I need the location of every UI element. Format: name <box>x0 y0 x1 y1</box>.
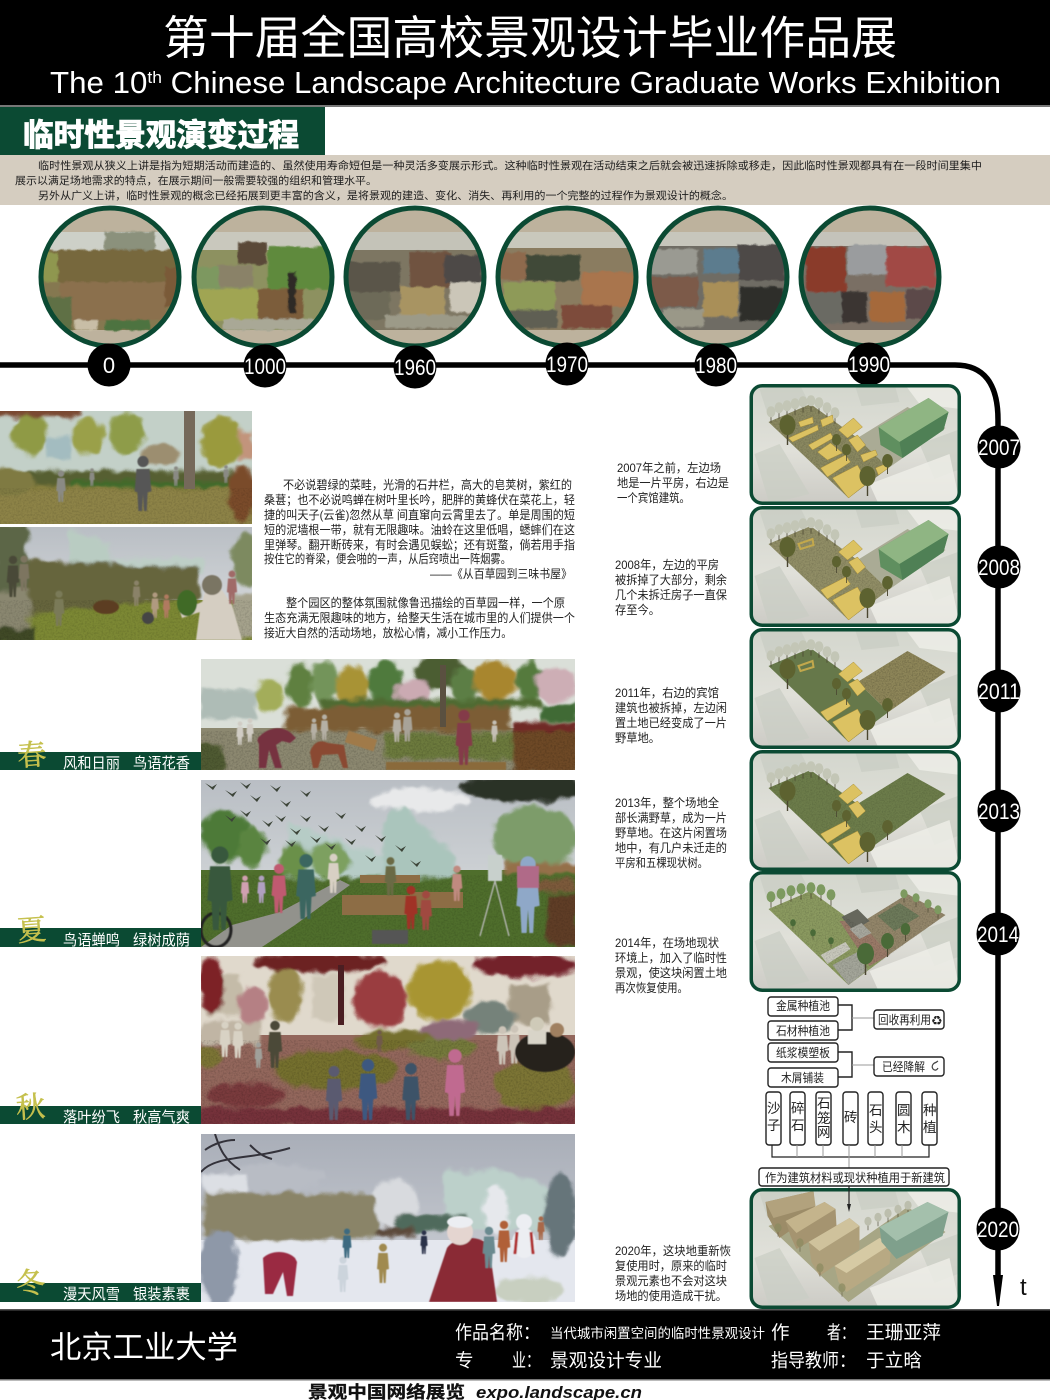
intro text band: 临时性景观从狭义上讲是指为短期活动而建造的、虽然使用寿命短但是一种灵活多变展示形式。这种临时性景观在活动结束之后就会被迅速拆除或移走，因此临时性景观都具有在一段时间里集中 <box>38 159 982 172</box>
note: 2014: 景观，使这块闲置土地 <box>615 965 727 980</box>
box: brick <box>843 1092 858 1145</box>
box: recycled <box>874 1010 944 1029</box>
box: recycled: 回收再利用 <box>878 1013 931 1027</box>
box: pulp formwork <box>768 1043 838 1062</box>
season band: autumn <box>0 1090 201 1126</box>
project details: 者： <box>827 1322 855 1343</box>
timeline node 2013 <box>978 790 1020 832</box>
note: 2014: 环境上，加入了临时性 <box>615 950 727 965</box>
timeline node 1000: 1000 <box>244 354 286 379</box>
box: logs: 木 <box>897 1120 911 1135</box>
note: 2007 <box>617 460 729 505</box>
box: reuse for new building: 作为建筑材料或现状种植用于新建筑 <box>765 1170 945 1185</box>
season band: winter: 冬 <box>15 1266 46 1301</box>
note: 2020 <box>615 1243 731 1303</box>
timeline node 2011 <box>978 670 1020 712</box>
circle photo 1970 <box>497 207 637 347</box>
timeline node 1980 <box>694 344 738 386</box>
note: 2008 <box>615 557 727 617</box>
note: 2011: 置土地已经变成了一片 <box>615 715 727 730</box>
project details: 指导教师： <box>771 1350 856 1371</box>
box: brick: 砖 <box>844 1110 858 1125</box>
site model panel 2013 <box>750 750 960 872</box>
project details: 王珊亚萍 <box>866 1322 941 1343</box>
season band: autumn: 落叶纷飞 <box>63 1109 120 1126</box>
season band: spring: 春 <box>16 738 47 773</box>
box: planting: 种 <box>923 1103 936 1118</box>
timeline node 2008: 2008 <box>978 555 1020 580</box>
season band: winter <box>0 1266 201 1303</box>
note: 2014: 2014年，在场地现状 <box>615 936 719 950</box>
box: crushed stone: 碎 <box>791 1101 804 1116</box>
project details: 作 <box>771 1322 790 1343</box>
text block: quote from Lu Xun: ——《从百草园到三味书屋》 <box>430 567 572 581</box>
text block: quote from Lu Xun: 里弹琴。翻开断砖来，有时会遇见蜈蚣；还有斑蝥，倘若用手指 <box>264 537 575 552</box>
timeline node 1980: 1980 <box>695 353 737 378</box>
season band: winter: 银装素裹 <box>133 1286 190 1303</box>
university name: 北京工业大学 <box>50 1330 238 1365</box>
timeline node 2013: 2013 <box>978 799 1020 824</box>
intro text band: 展示以满足场地需求的特点，在展示期间一般需要较强的组织和管理水平。 <box>15 174 377 187</box>
circle photo 1000 <box>191 207 335 347</box>
box: gabion: 网 <box>817 1125 830 1140</box>
timeline node 1970: 1970 <box>546 352 588 377</box>
arrow to new building panel <box>847 1186 851 1212</box>
season band: summer: 绿树成荫 <box>133 932 190 949</box>
timeline node 2008 <box>978 546 1020 588</box>
section heading tab: 临时性景观演变过程 <box>23 118 299 153</box>
box: sand <box>766 1092 781 1145</box>
note: 2011 <box>615 685 727 745</box>
timeline node 2020: 2020 <box>977 1217 1019 1242</box>
note: 2007: 一个宾馆建筑。 <box>617 490 690 505</box>
timeline node 2020 <box>976 1208 1020 1250</box>
box: wood chip paving <box>768 1068 838 1087</box>
season band: autumn: 秋 <box>15 1090 46 1125</box>
season band: summer <box>0 914 201 949</box>
timeline node 1990 <box>848 342 890 386</box>
box: logs <box>896 1092 911 1145</box>
timeline line with arrow <box>0 365 1003 1306</box>
season band: summer: 夏 <box>16 914 47 948</box>
photo: winter scene <box>199 1134 576 1306</box>
circle photo 1960 <box>345 207 485 347</box>
box: stones <box>868 1092 883 1145</box>
note: 2007: 2007年之前，左边场 <box>617 460 721 475</box>
timeline node 1000 <box>244 344 286 388</box>
text block: quote from Lu Xun: 桑葚；也不必说鸣蝉在树叶里长吟，肥胖的黄蜂伏在菜花上，轻 <box>264 492 575 507</box>
box: recycled: ♻ <box>931 1014 943 1029</box>
project details: 作品名称： <box>455 1322 540 1343</box>
circle photo 1980 <box>648 207 788 347</box>
site model panel 2020 <box>750 1188 960 1310</box>
note: 2013: 平房和五棵现状树。 <box>615 855 708 870</box>
note: 2020: 景观元素也不会对这块 <box>615 1273 727 1288</box>
text block: quote from Lu Xun: 短的泥墙根一带，就有无限趣味。油蛉在这里低唱，蟋蟀们在这 <box>264 522 575 537</box>
note: 2008: 几个未拆迁房子一直保 <box>615 587 727 602</box>
project details: 于立晗 <box>866 1350 922 1371</box>
timeline node 1960 <box>394 346 436 388</box>
box: planting <box>922 1092 937 1145</box>
circle photo 1990 <box>800 207 940 347</box>
intro text band <box>0 155 1050 205</box>
box: gabion: 石 <box>817 1096 830 1111</box>
project details <box>455 1322 941 1371</box>
subtitle: The 10 <box>50 66 145 100</box>
season band: spring: 风和日丽 <box>63 755 120 772</box>
note: 2013: 地中，有几户未迁走的 <box>615 840 727 855</box>
season band: spring <box>0 738 201 773</box>
note: 2008: 2008年，左边的平房 <box>615 557 719 572</box>
season band: summer: 鸟语蝉鸣 <box>63 932 120 949</box>
timeline node 2014: 2014 <box>977 922 1019 947</box>
box: metal planters <box>768 997 838 1016</box>
project details: 专 <box>455 1350 474 1371</box>
text block: quote from Lu Xun <box>264 477 575 581</box>
box: gabion <box>816 1092 831 1145</box>
box: stone planters <box>768 1021 838 1040</box>
connector: materials into new building <box>772 1145 929 1157</box>
note: 2013: 部长满野草，成为一片 <box>615 810 727 825</box>
note: 2013: 2013年，整个场地全 <box>615 795 719 810</box>
footer band <box>0 1309 1050 1380</box>
text block: park atmosphere: 整个园区的整体氛围就像鲁迅描绘的百草园一样，一个原 <box>286 595 565 610</box>
timeline node 2007: 2007 <box>978 435 1020 460</box>
box: logs: 圆 <box>897 1103 910 1118</box>
box: wood chip paving: 木屑铺装 <box>781 1071 824 1085</box>
timeline node 0 <box>88 344 130 386</box>
photo: elder and picnic by gabion wall <box>0 525 259 643</box>
timeline node 1960: 1960 <box>394 355 436 380</box>
box: crushed stone <box>790 1092 805 1145</box>
subtitle: th <box>147 68 162 87</box>
note: 2013: 野草地。在这片闲置场 <box>615 825 727 840</box>
box: stones: 头 <box>869 1120 882 1135</box>
project details: 业： <box>512 1350 540 1371</box>
title: 第十届全国高校景观设计毕业作品展 <box>163 12 897 64</box>
text block: park atmosphere: 接近大自然的活动场地，放松心情，减小工作压力。 <box>264 625 512 640</box>
text block: quote from Lu Xun: 按住它的脊梁，便会啪的一声，从后窍喷出一阵烟雾。 <box>264 551 511 566</box>
site model panel 2011 <box>750 628 960 750</box>
timeline node 2007 <box>978 426 1020 468</box>
season band: winter: 漫天风雪 <box>63 1286 120 1303</box>
photo: children playing in meadow <box>0 405 256 526</box>
connectors: recycled materials <box>838 1005 874 1077</box>
text block: park atmosphere <box>264 595 575 640</box>
text block: quote from Lu Xun: 不必说碧绿的菜畦，光滑的石井栏，高大的皂荚树，紫红的 <box>283 477 572 492</box>
note: 2007: 地是一片平房，右边是 <box>617 475 729 490</box>
box: stone planters: 石材种植池 <box>776 1023 830 1038</box>
note: 2011: 2011年，右边的宾馆 <box>615 685 719 700</box>
note: 2014 <box>615 936 727 995</box>
season band: autumn: 秋高气爽 <box>133 1109 190 1126</box>
note: 2020: 场地的使用造成干扰。 <box>615 1288 727 1303</box>
site credit <box>308 1382 642 1400</box>
photo: spring scene <box>199 654 577 772</box>
note: 2011: 建筑也被拆掉，左边闲 <box>615 700 727 715</box>
time axis label: t <box>1020 1274 1027 1301</box>
header band <box>0 0 1050 107</box>
section heading tab <box>0 107 325 155</box>
note: 2011: 野草地。 <box>615 731 660 745</box>
site model panel 2008 <box>750 506 960 628</box>
box: stones: 石 <box>869 1103 882 1118</box>
intro text band: 另外从广义上讲，临时性景观的概念已经拓展到更丰富的含义，是将景观的建造、变化、消失、再利用的一个完整的过程作为景观设计的概念。 <box>38 189 733 202</box>
note: 2020: 2020年，这块地重新恢 <box>615 1243 731 1258</box>
box: planting: 植 <box>923 1120 936 1135</box>
text block: quote from Lu Xun: 捷的叫天子(云雀)忽然从草 间直窜向云霄里去了。单是周围的短 <box>264 507 575 522</box>
circle photo 0 <box>38 207 182 347</box>
text block: park atmosphere: 生态充满无限趣味的地方，给整天生活在城市里的人们提供一个 <box>264 610 575 625</box>
subtitle: Chinese Landscape Architecture Graduate Works Exhibition <box>162 66 1001 100</box>
photo: autumn scene <box>195 952 577 1126</box>
note: 2020: 复使用时，原来的临时 <box>615 1258 727 1273</box>
timeline node 1990: 1990 <box>848 352 890 377</box>
project details: 景观设计专业 <box>550 1350 662 1371</box>
flow diagram: material reuse <box>759 997 949 1212</box>
note: 2014: 再次恢复使用。 <box>615 980 688 995</box>
box: pulp formwork: 纸浆模塑板 <box>776 1045 830 1060</box>
box: gabion: 笼 <box>817 1110 830 1126</box>
box: degraded: 已经降解 <box>882 1060 925 1074</box>
photo: summer scene <box>201 774 585 947</box>
season band: spring: 鸟语花香 <box>133 755 190 772</box>
note: 2008: 存至今。 <box>615 602 660 617</box>
timeline node 2014 <box>976 912 1020 956</box>
project details: 当代城市闲置空间的临时性景观设计 <box>550 1325 765 1341</box>
note: 2013 <box>615 795 727 870</box>
site model panel 2007 <box>750 384 960 506</box>
box: degraded <box>874 1057 944 1076</box>
timeline node 0: 0 <box>103 353 115 378</box>
site model panel 2014 <box>750 871 960 993</box>
note: 2008: 被拆掉了大部分，剩余 <box>615 572 727 587</box>
timeline node 1970 <box>546 342 588 386</box>
timeline node 2011: 2011 <box>978 679 1020 704</box>
box: sand: 沙 <box>767 1101 780 1116</box>
box: crushed stone: 石 <box>791 1118 804 1133</box>
box: sand: 子 <box>767 1118 780 1133</box>
box: metal planters: 金属种植池 <box>776 998 830 1013</box>
